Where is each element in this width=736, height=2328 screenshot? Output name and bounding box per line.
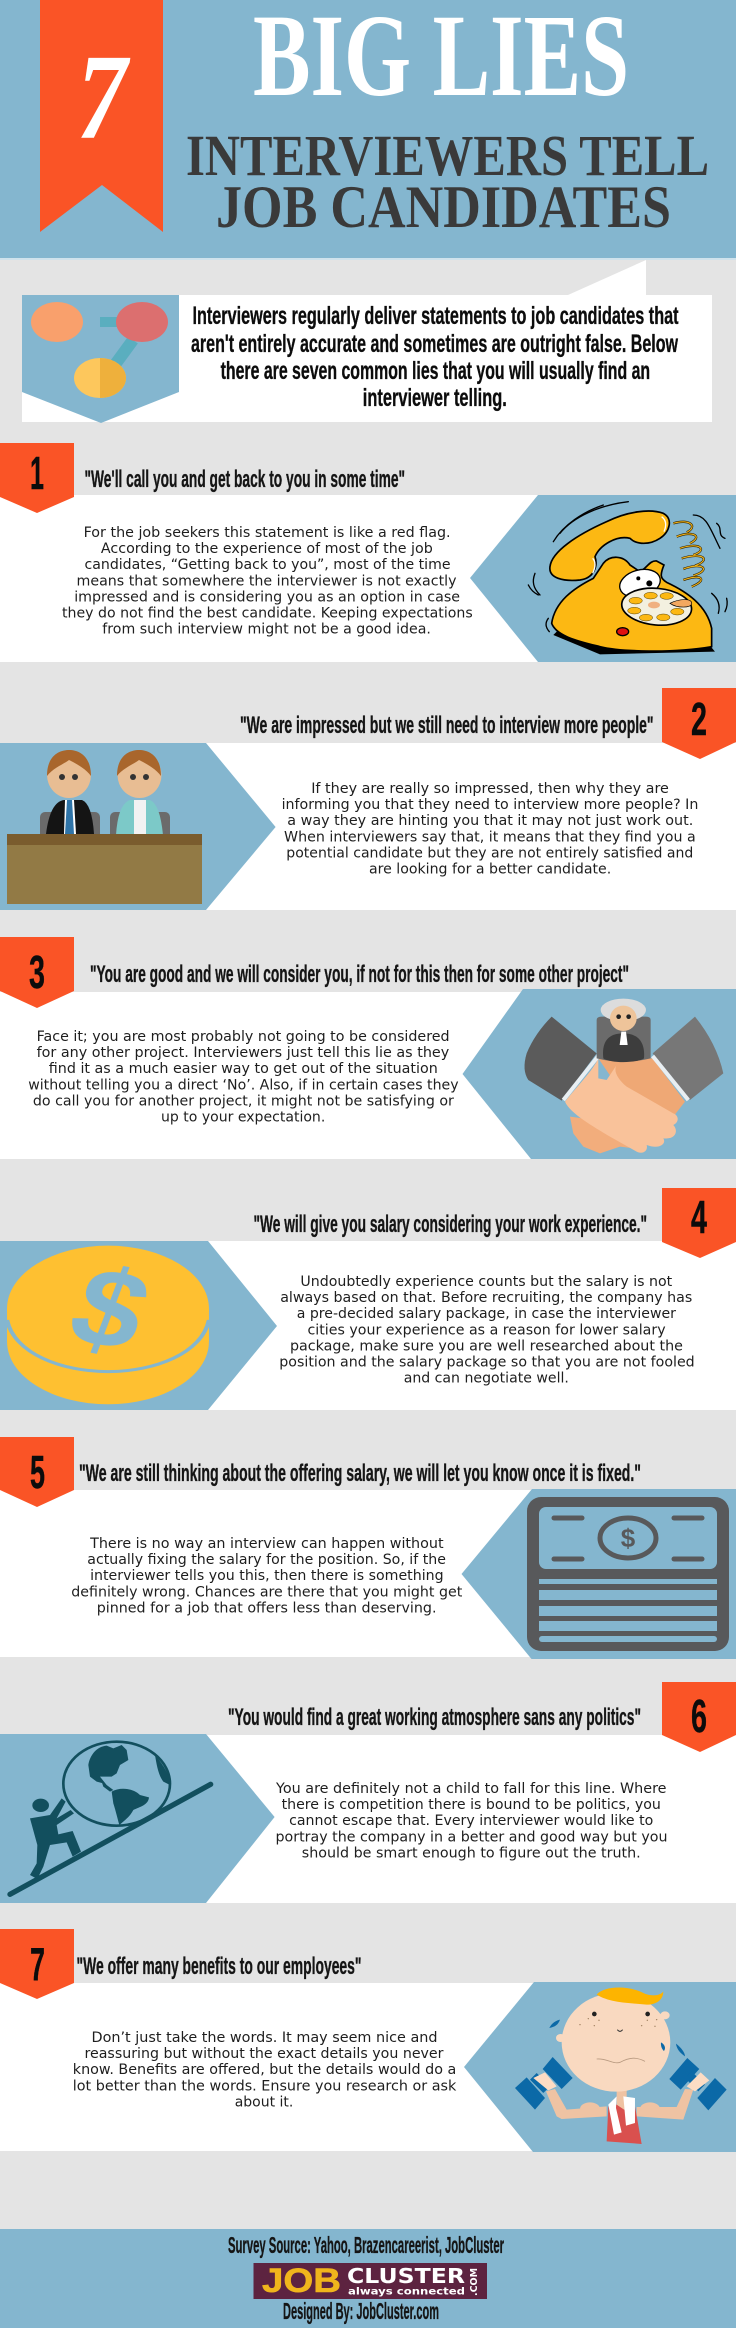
body 5: definitely wrong. Chances are there that you might get (71, 1584, 463, 1600)
body 6: You are definitely not a child to fall for this line. Where (275, 1781, 667, 1797)
body 1: candidates, “Getting back to you”, most of the time (84, 557, 451, 573)
icon: stack of banknotes: $ (621, 1523, 636, 1553)
body 1: they do not find the best candidate. Keeping expectations (62, 606, 473, 622)
body 4: cities your experience as a reason for lower salary (308, 1322, 666, 1338)
body 7: about it. (235, 2094, 293, 2110)
badge 7: 7 (30, 1938, 45, 1990)
illustration: man pushing globe uphill (10, 1742, 211, 1894)
illustration: handshake with judge (525, 999, 723, 1153)
body 4: and can negotiate well. (404, 1371, 569, 1387)
badge 4: 4 (691, 1191, 707, 1243)
body 1: means that somewhere the interviewer is not exactly (76, 573, 457, 589)
body 4: a pre-decided salary package, in case the interviewer (297, 1306, 676, 1322)
intro text (191, 302, 679, 412)
body 2: If they are really so impressed, then why they are (311, 781, 669, 797)
heading 1: "We'll call you and get back to you in some time" (84, 466, 405, 493)
icon: connected circles shield (22, 295, 179, 423)
illustration: gold coin with dollar (7, 1242, 209, 1404)
body 6: portray the company in a better and good way but you (276, 1829, 668, 1845)
body 2: informing you that they need to interview more people? In (282, 797, 698, 813)
body 5 (71, 1536, 463, 1616)
intro text: interviewer telling. (363, 384, 507, 412)
body 2: When interviewers say that, it means that they find you a (284, 829, 696, 845)
panel: lie 3 (0, 937, 736, 1159)
illustration: two interviewers at a desk (7, 750, 202, 904)
badge 2: 2 (691, 693, 707, 745)
body 4 (279, 1274, 695, 1387)
panel: lie 7 (0, 1929, 736, 2152)
body 3: Face it; you are most probably not going to be considered (37, 1029, 450, 1045)
body 5: actually fixing the salary for the position. So, if the (87, 1552, 446, 1568)
body 7: Don’t just take the words. It may seem nice and (92, 2030, 438, 2046)
badge 3: 3 (29, 946, 45, 998)
icon: stack of banknotes (527, 1497, 729, 1651)
logo: job cluster (254, 2262, 487, 2300)
icon: ringing telephone (528, 502, 727, 654)
body 4: always based on that. Before recruiting, the company has (280, 1290, 692, 1306)
body 7: know. Benefits are offered, but the details would do a (73, 2062, 456, 2078)
panel: lie 1 (0, 443, 736, 662)
badge 5 (0, 1437, 74, 1507)
body 3: do call you for another project, it might not be satisfying or (33, 1093, 454, 1109)
body 1 (62, 525, 473, 638)
badge 6 (662, 1682, 736, 1752)
ribbon: number 7 (40, 0, 163, 232)
body 3: up to your expectation. (161, 1110, 325, 1126)
heading 7: "We offer many benefits to our employees" (76, 1953, 362, 1980)
illustration: gold coin with dollar: $ (54, 1242, 166, 1374)
badge 7 (0, 1929, 74, 1999)
body 4: Undoubtedly experience counts but the salary is not (300, 1274, 673, 1290)
body 4: package, make sure you are well researched about the (290, 1338, 683, 1354)
badge 4 (662, 1188, 736, 1258)
panel: introduction (22, 260, 712, 423)
body 1: According to the experience of most of the job (101, 541, 433, 557)
body 6: cannot escape that. Every interviewer would like to (289, 1813, 653, 1829)
body 7: reassuring but without the exact details you never (84, 2046, 444, 2062)
body 7: lot better than the words. Ensure you research or ask (73, 2078, 457, 2094)
body 5: interviewer tells you this, then there is something (90, 1568, 444, 1584)
badge 6: 6 (691, 1690, 707, 1742)
logo: job cluster: JOB (262, 2262, 341, 2300)
body 1: For the job seekers this statement is like a red flag. (84, 525, 451, 541)
body 3 (28, 1029, 459, 1126)
body 6 (275, 1781, 668, 1861)
body 3: for any other project. Interviewers just tell this lie as they (37, 1045, 450, 1061)
body 2: potential candidate but they are not entirely satisfied and (286, 845, 693, 861)
body 3: find it as a much easier way to get out of the situation (49, 1061, 438, 1077)
panel: lie 5 (0, 1437, 736, 1659)
body 6: there is competition there is bound to be politics, you (282, 1797, 661, 1813)
ribbon: number 7: 7 (77, 30, 131, 165)
body 2: are looking for a better candidate. (369, 862, 611, 878)
body 5: pinned for a job that offers less than deserving. (97, 1600, 436, 1616)
badge 3 (0, 937, 74, 1008)
body 6: should be smart enough to figure out the truth. (302, 1845, 641, 1861)
body 2 (282, 781, 698, 878)
body 1: from such interview might not be a good idea. (102, 622, 431, 638)
body 2: a way they are hinting you that it may not just work out. (287, 813, 693, 829)
logo: job cluster: .COM (469, 2268, 480, 2296)
body 1: impressed and is considering you as an option in case (74, 589, 460, 605)
body 5: There is no way an interview can happen without (89, 1536, 444, 1552)
badge 1 (0, 443, 74, 513)
body 4: position and the salary package so that you are not fooled (279, 1354, 695, 1370)
panel: lie 6 (0, 1682, 736, 1903)
body 3: without telling you a direct ‘No’. Also, if in certain cases they (28, 1077, 459, 1093)
badge 1: 1 (30, 447, 44, 499)
title: interviewers tell job candidates: JOB CANDIDATES (216, 174, 671, 240)
illustration: sweating man with dumbbells (515, 1988, 727, 2144)
logo: job cluster: always connected (348, 2286, 465, 2298)
footer band (0, 2229, 736, 2328)
footer band: Designed By: JobCluster.com (283, 2298, 439, 2324)
title: interviewers tell job candidates (186, 123, 709, 240)
badge 5: 5 (30, 1446, 45, 1498)
panel: lie 4 (0, 1188, 736, 1410)
panel: lie 2 (0, 688, 736, 910)
body 7 (73, 2030, 457, 2110)
badge 2 (662, 688, 736, 759)
header band (0, 0, 736, 260)
logo: job cluster: CLUSTER (347, 2264, 465, 2288)
